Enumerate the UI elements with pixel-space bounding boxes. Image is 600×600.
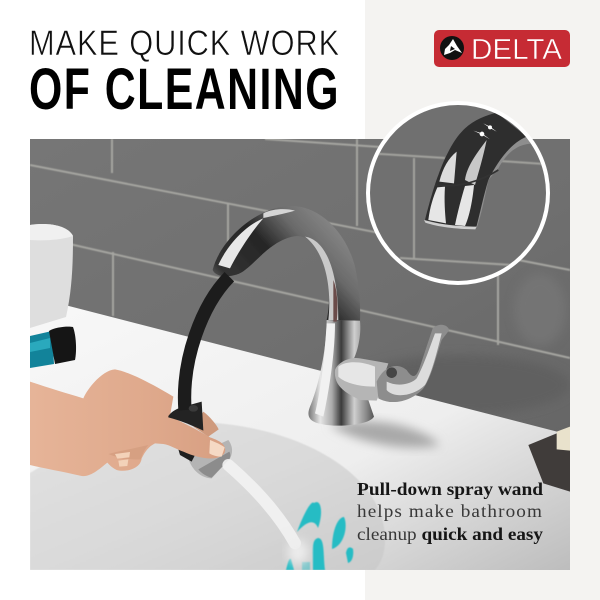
caption	[357, 479, 543, 544]
caption line one: Pull-down spray wand	[357, 479, 543, 499]
hand holding wand	[30, 277, 295, 543]
icon: Delta emblem	[440, 36, 464, 60]
title line one: MAKE QUICK WORK	[29, 24, 340, 63]
faucet body	[308, 320, 374, 426]
hand back fingers	[193, 412, 219, 437]
counter top	[30, 296, 570, 570]
wand grip	[168, 402, 203, 431]
inset tile background	[370, 105, 546, 281]
fingernails	[209, 440, 225, 457]
Delta logo	[434, 30, 570, 67]
faucet spout arc	[213, 206, 360, 321]
logo wordmark: DELTA	[471, 34, 563, 66]
inset spout	[424, 113, 535, 229]
spray wand chrome head	[188, 440, 232, 478]
sink basin	[30, 422, 385, 570]
water stream	[228, 465, 295, 543]
spray hose	[185, 277, 229, 410]
faucet handle	[335, 358, 388, 401]
title	[29, 24, 340, 122]
wand lower grip	[178, 450, 195, 462]
hose socket	[189, 405, 198, 412]
right background panel	[365, 0, 600, 600]
teal cleaning splashes	[286, 502, 353, 570]
inset circle: spout close-up	[366, 101, 550, 285]
photo: bathroom faucet scene	[30, 139, 580, 570]
soap dish	[528, 426, 570, 492]
tile wall	[30, 139, 570, 439]
faucet lever	[377, 325, 449, 402]
faucet	[213, 206, 449, 426]
caption line three: cleanup quick and easy	[357, 524, 543, 544]
hand	[30, 369, 225, 476]
white cup	[30, 224, 73, 328]
caption line two: helps make bathroom	[357, 501, 543, 521]
water pool	[288, 540, 308, 564]
bottle	[30, 327, 76, 368]
title line two: OF CLEANING	[29, 57, 340, 122]
faucet shadow	[330, 421, 440, 448]
inset spout lip	[424, 220, 477, 229]
inset sparkles	[473, 123, 497, 139]
inset spout seam	[435, 170, 498, 186]
